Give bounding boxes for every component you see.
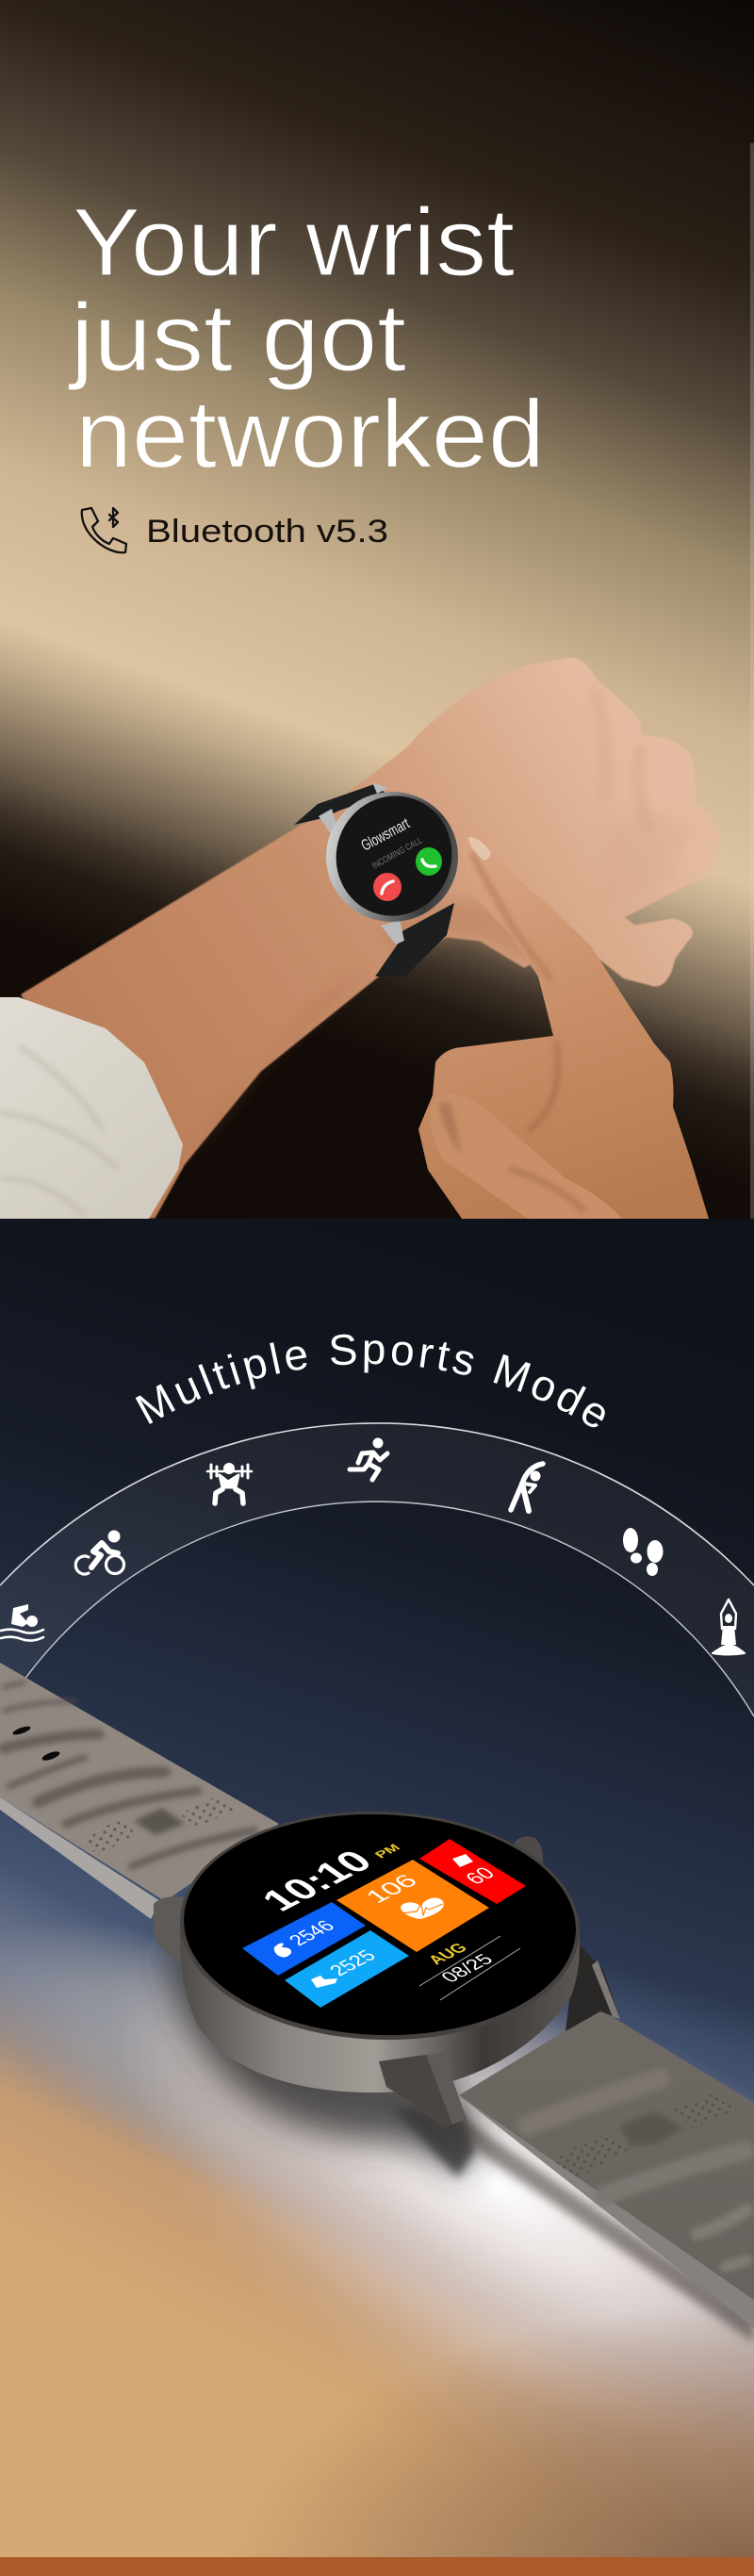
icon: cyclist [75,1531,124,1574]
title: just got [68,284,406,391]
strap texture [551,2094,737,2179]
pointing hand [418,835,709,1219]
icon: footprints [623,1528,664,1576]
arc band [0,1423,754,1716]
tile: calories: 2546 [284,1917,340,1949]
strap ribs [528,2078,746,2267]
arm with hand [24,660,716,1216]
lugs and crown [154,1836,620,2031]
date: 08/25 [435,1950,498,1986]
time: 10:10 [252,1844,382,1917]
screen [180,1808,580,2042]
tile: battery: 60 [461,1864,500,1888]
tile: steps: 2525 [324,1947,381,1979]
icon: runner [350,1438,387,1480]
right strap [459,2010,754,2328]
subtitle: bluetooth version: Bluetooth v5.3 [146,514,388,550]
bezel [176,1805,583,2046]
caller name: Glowsmart [358,815,413,855]
lugs [319,782,404,944]
panel: bluetooth hero [0,0,754,1219]
pm label: PM [372,1843,403,1861]
strap: black [294,784,454,976]
tile: steps [285,1930,409,2008]
incoming call label: INCOMING CALL [370,835,424,872]
accept button [416,847,442,876]
watch case [180,1926,580,2092]
smartwatch [154,1805,620,2128]
tile: heart rate: 106 [359,1870,423,1907]
icon: bluetooth phone [82,508,126,552]
decline button [373,873,402,901]
strap holes [12,1725,61,1763]
screen [320,779,468,932]
tile: battery [419,1839,526,1904]
icon: yoga [713,1600,745,1655]
icon: weightlifter [207,1463,252,1503]
date: AUG [424,1941,471,1968]
bottom strip [0,2557,754,2576]
title: Your wrist [73,189,515,296]
date [419,1936,520,2000]
tile: heart rate [336,1860,489,1952]
shadow under watch [165,1942,481,2177]
smartwatch on wrist [294,779,468,976]
panel: sports modes [0,1219,754,2576]
curved heading: Multiple Sports Mode [136,1335,605,1427]
watch case [326,792,458,922]
sleeve [0,997,183,1219]
left strap [0,1663,279,1919]
icon: swimmer [1,1604,43,1641]
icon: stretching [511,1464,543,1511]
title [68,189,545,488]
title: networked [75,381,545,488]
strap texture [80,1796,240,1855]
strap ribs [4,1682,254,1866]
tile: calories [242,1902,366,1976]
strap shadow on table [452,2111,754,2342]
